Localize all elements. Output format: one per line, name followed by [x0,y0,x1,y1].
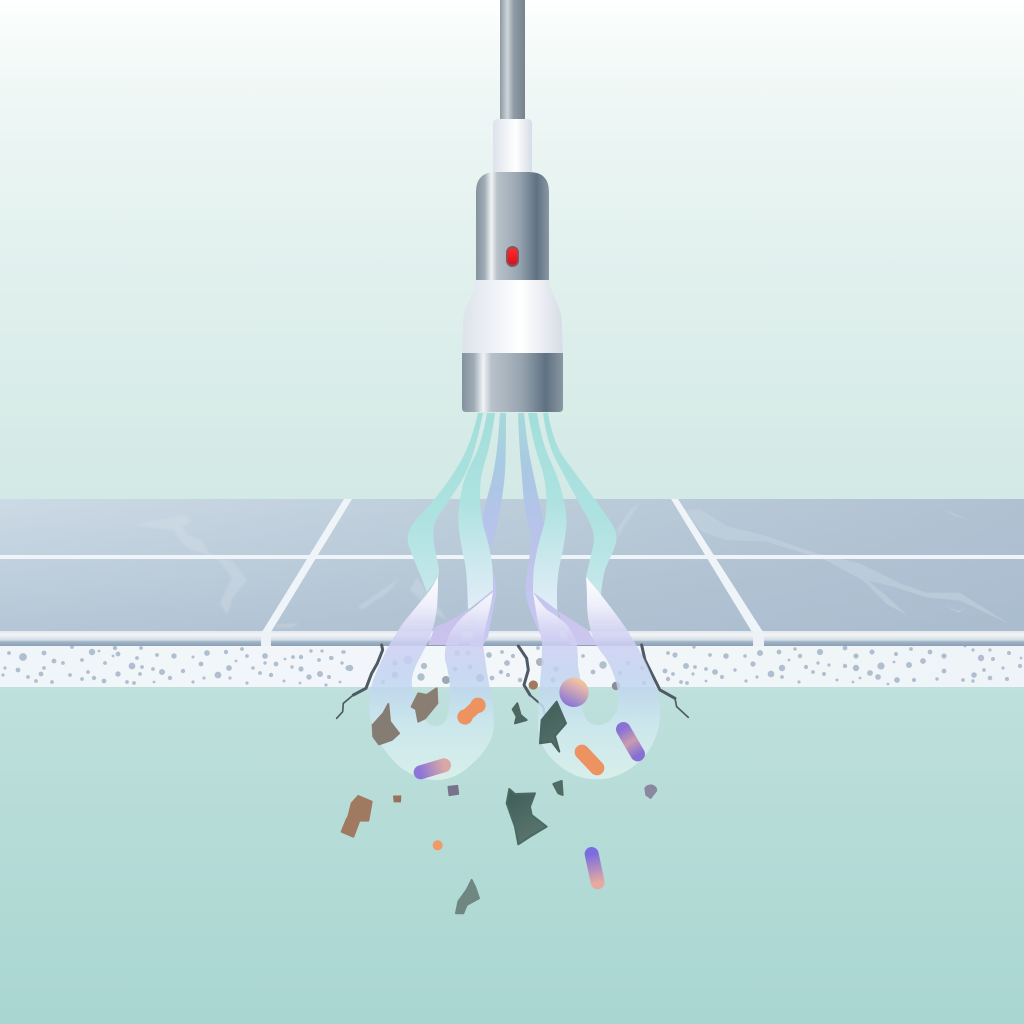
grout lines [0,499,1024,632]
nozzle: white collar [493,119,532,172]
background: upper wall [0,0,1024,500]
nozzle: metal base [462,353,563,412]
water jets [369,413,660,780]
debris: dark shard with spike [540,702,566,752]
nozzle: rod [500,0,525,120]
debris: brown chip [342,796,372,837]
debris and bacteria particles [342,678,657,913]
jet: purple crossing left [428,608,470,645]
debris: small grey square [448,786,458,795]
debris: large dark shard [507,789,547,844]
bacteria: purple-pink pill [592,854,598,882]
background: subsurface water [0,686,1024,1024]
nozzle: metal body [476,172,549,280]
jet: second right ribbon [528,413,566,610]
jet: inner right lavender ribbon [518,413,560,640]
bacteria: orange bean [457,698,486,725]
debris: grey-brown chip left [373,704,399,744]
water loop: right swirl [533,577,660,779]
marble veins on left tiles [133,503,640,628]
bacteria: purple pill right [623,729,638,754]
jet: second left ribbon [458,413,495,610]
nozzle: white flared sleeve [462,280,563,353]
cracks in surface [337,645,688,718]
marble vein right [685,509,1008,623]
panel: foam band with dots [0,645,1024,690]
particle: gradient ball [559,678,589,707]
nozzle: red indicator [506,246,519,267]
rail: tile edge trim [0,631,1024,646]
debris: grey-brown chip top [412,688,437,722]
debris: tiny brown square [393,796,401,802]
jet: outer right ribbon [543,413,617,595]
debris: bottom grey chip [456,880,479,913]
jet: inner left lavender ribbon [470,413,506,647]
water loop: left swirl [369,577,494,780]
bacteria: purple pill left [421,765,444,772]
panel: tiled surface [0,499,1024,633]
bacteria: orange pill [582,752,597,768]
jet: outer left ribbon [408,413,483,592]
debris: small dark chip [553,781,563,795]
particle: orange dot [433,840,443,850]
particle: small brown ball [529,680,538,690]
particle: grey drop [645,785,657,798]
jet: purple crossing right [558,611,597,645]
nozzle assembly [462,0,563,412]
debris: small dark shard [513,703,527,723]
